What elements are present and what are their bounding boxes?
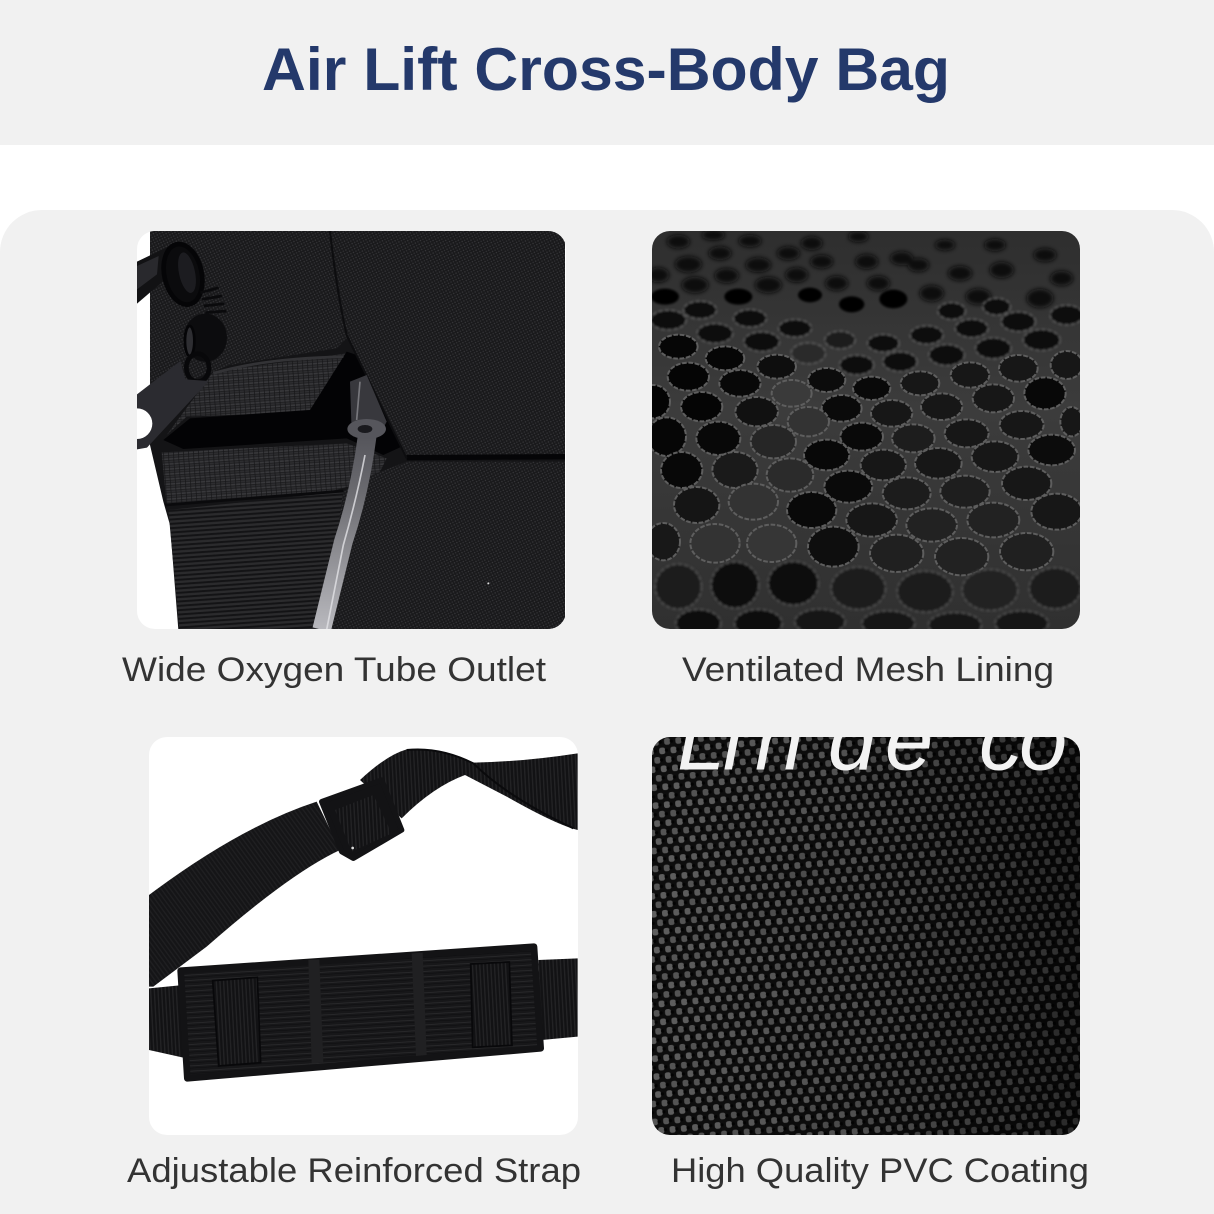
photo: wide oxygen tube outlet (122, 231, 566, 630)
oxygen tube (322, 375, 387, 630)
photo: adjustable reinforced strap (149, 737, 578, 1135)
printed logo text: Linde co (677, 692, 1067, 788)
title: Air Lift Cross-Body Bag (262, 36, 950, 103)
title band (0, 0, 1214, 145)
label: ventilated mesh lining: Ventilated Mesh Lining (682, 651, 1054, 689)
zipper pulls (137, 242, 227, 450)
shoulder pad (181, 947, 541, 1078)
label: high quality PVC coating: High Quality PVC Coating (671, 1152, 1089, 1190)
label: wide oxygen tube outlet: Wide Oxygen Tube Outlet (122, 651, 547, 689)
lower strap (149, 958, 578, 1058)
upper strap (149, 749, 578, 987)
buckle (322, 780, 402, 858)
label: adjustable reinforced strap: Adjustable Reinforced Strap (127, 1152, 581, 1190)
photo: high quality PVC coating (652, 737, 1080, 1135)
photo: ventilated mesh lining (637, 230, 1083, 638)
